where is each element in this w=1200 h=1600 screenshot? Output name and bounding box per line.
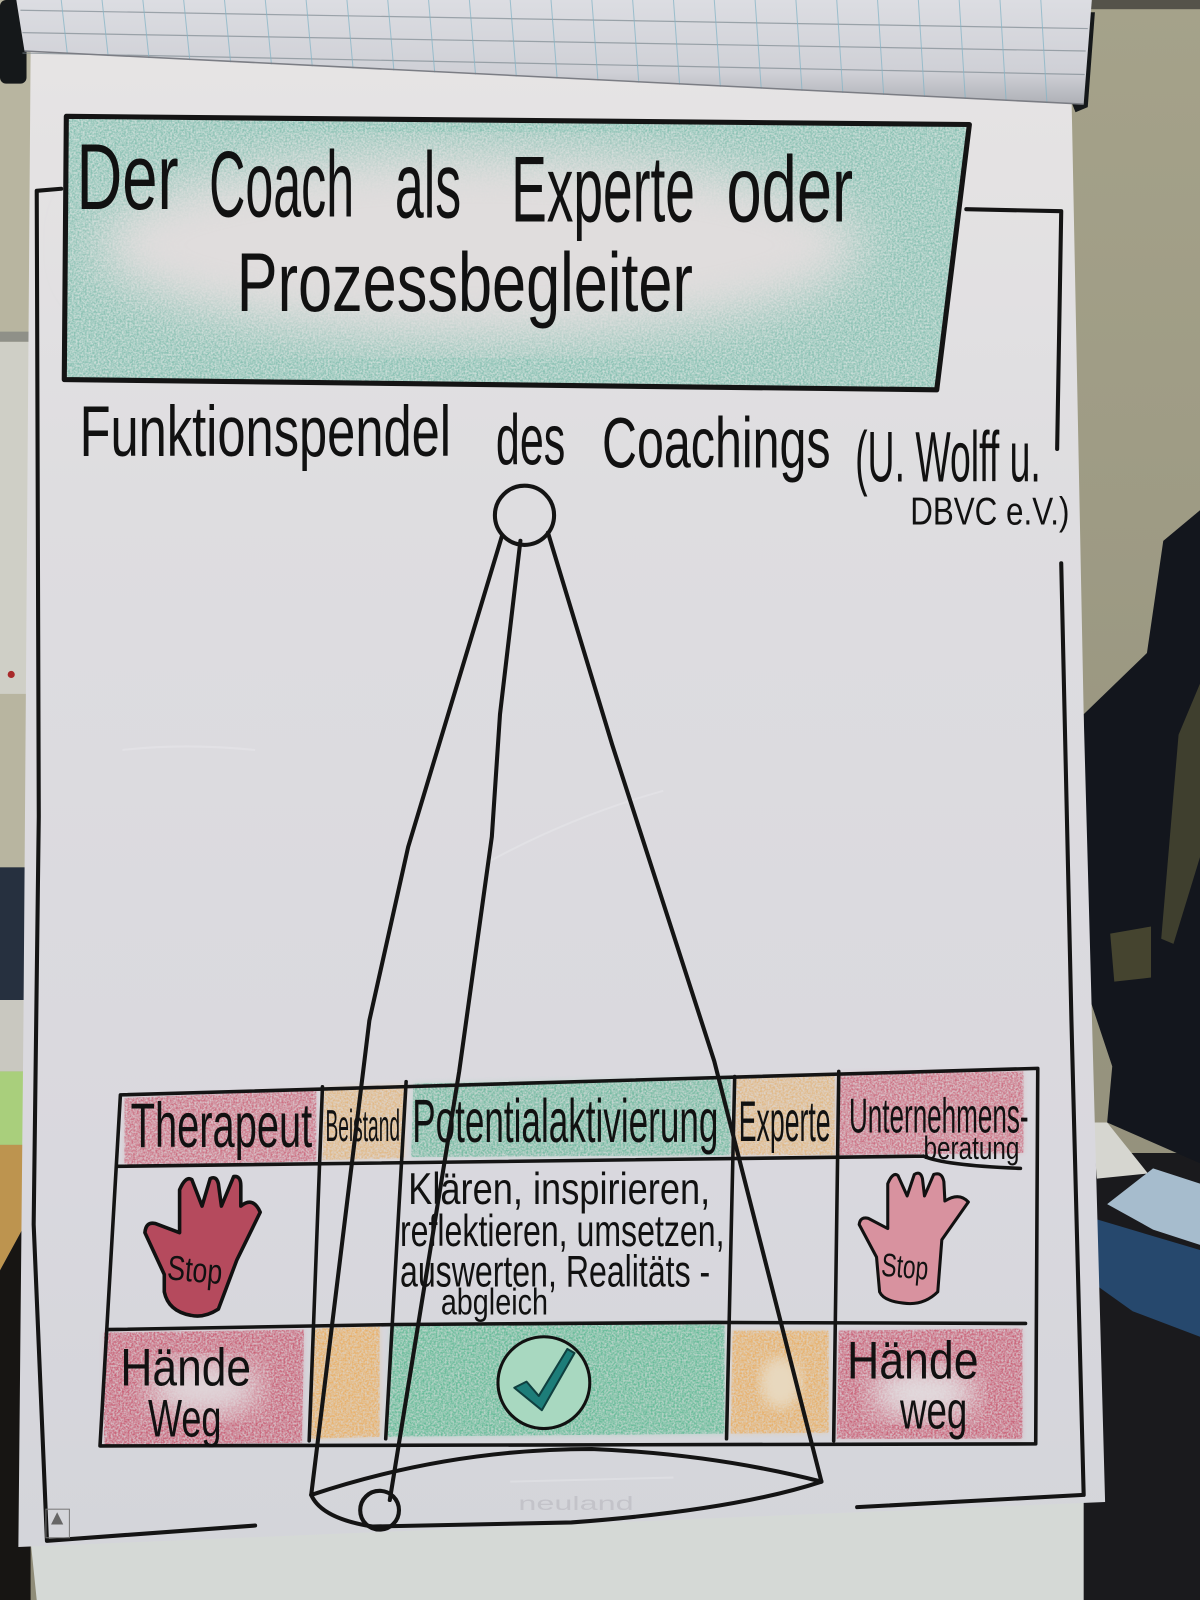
subtitle: DBVC e.V.) (910, 490, 1069, 533)
title line 1: oder (727, 136, 853, 241)
icon: right stop hand (859, 1173, 968, 1304)
FSC mark (46, 1509, 69, 1538)
table header labels: beratung (923, 1129, 1019, 1166)
manufacturer logo: neuland (518, 1493, 634, 1515)
table header labels: Potentialaktivierung (412, 1087, 718, 1155)
paper creases (122, 746, 673, 1482)
pendulum diagram (311, 486, 821, 1530)
table grid lines (100, 1068, 1038, 1446)
subtitle: des (496, 400, 565, 480)
icon: right stop hand: Stop (880, 1246, 930, 1287)
paper roll with grid (0, 0, 1095, 112)
text block: potential activation verbs: auswerten, Realitäts - (400, 1246, 710, 1297)
table header labels: Experte (739, 1090, 831, 1154)
table header labels: Unternehmens- (849, 1090, 1029, 1144)
subtitle (80, 392, 1069, 533)
pendulum pivot (495, 486, 554, 545)
table header labels: Beistand (326, 1100, 400, 1151)
title line 1 (77, 124, 853, 241)
table header labels (131, 1087, 1029, 1166)
title line 1: Der (77, 124, 179, 229)
label: Hände weg left: Hände (120, 1339, 251, 1398)
icon: check mark in circle (498, 1337, 590, 1429)
icon: left stop hand (145, 1176, 260, 1316)
jacket on the right (1084, 510, 1200, 1163)
text block: potential activation verbs: reflektieren, umsetzen, (400, 1205, 724, 1256)
title line 1: als (395, 132, 461, 237)
text block: potential activation verbs: Klären, inspirieren, (408, 1163, 710, 1214)
title line 1: Coach (209, 131, 354, 236)
outer hand-drawn frame (34, 189, 1084, 1541)
subtitle: Coachings (602, 403, 831, 483)
panel: crayon fills of table (104, 1071, 1023, 1445)
label: Hände weg right: weg (899, 1382, 967, 1441)
label: Hände weg left: Weg (148, 1390, 221, 1449)
label: Hände weg right (847, 1332, 979, 1441)
subtitle: (U. Wolff u. (855, 418, 1041, 498)
title line 1: Experte (511, 136, 695, 241)
table with blue sheets (1092, 1122, 1200, 1337)
text block: potential activation verbs (400, 1163, 724, 1322)
table header labels: Therapeut (131, 1091, 313, 1161)
subtitle: Funktionspendel (80, 392, 451, 472)
icon: left stop hand: Stop (166, 1249, 224, 1292)
text block: potential activation verbs: abgleich (441, 1281, 548, 1322)
next sheet below (31, 1500, 1084, 1600)
label: Hände weg left (120, 1339, 251, 1449)
label: Hände weg right: Hände (847, 1332, 979, 1391)
title line 2: Prozessbegleiter (237, 235, 693, 329)
panel: title box (64, 116, 969, 390)
